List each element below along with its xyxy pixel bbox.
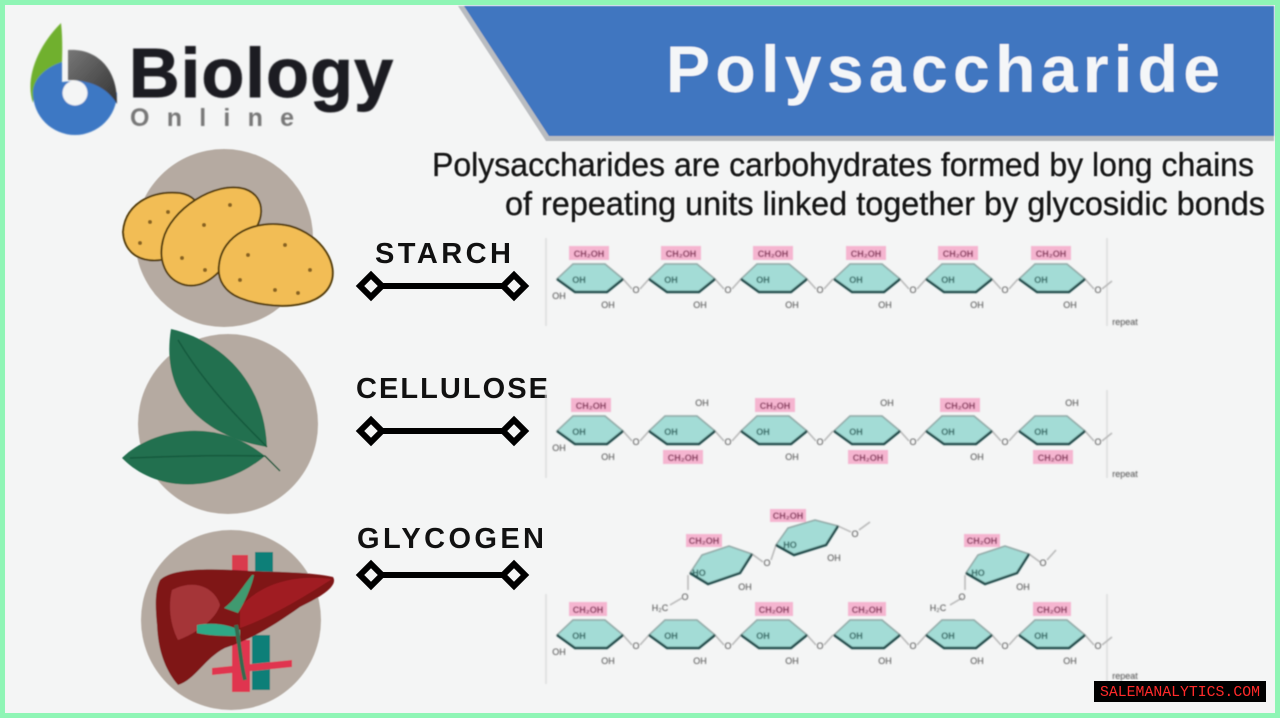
starch chain: OH — [878, 300, 892, 310]
icon: logo grey arc — [68, 50, 117, 104]
cellulose chain: OH — [849, 427, 863, 437]
title banner — [458, 6, 1274, 141]
starch chain: OH — [664, 275, 678, 285]
icon: liver — [141, 530, 334, 710]
branch ring 2 — [770, 509, 841, 563]
watermark: SALEMANALYTICS.COM — [1100, 685, 1260, 701]
glycogen chain: OH — [664, 631, 678, 641]
cellulose chain — [546, 390, 1138, 479]
glycogen chain: O — [816, 641, 824, 651]
glycogen chain: repeat — [1112, 671, 1138, 681]
glycogen chain: CH₂OH — [1037, 605, 1067, 615]
starch chain: O — [1094, 285, 1102, 295]
cellulose chain: OH — [1065, 398, 1079, 408]
glycogen chain: OH — [601, 656, 615, 666]
cellulose chain: OH — [970, 452, 984, 462]
description text: Polysaccharides are carbohydrates formed by long chains — [432, 146, 1254, 183]
glycogen chain: H₂C — [652, 603, 669, 613]
icon: potatoes — [123, 149, 333, 327]
cellulose chain: CH₂OH — [576, 401, 606, 411]
glycogen chain: O — [763, 558, 771, 568]
cellulose chain: O — [1094, 437, 1102, 447]
cellulose chain: O — [909, 437, 917, 447]
cellulose chain: O — [632, 437, 640, 447]
glycogen chain: OH — [1063, 656, 1077, 666]
branch ring 1: HO — [692, 568, 706, 578]
starch chain: OH — [1034, 275, 1048, 285]
starch chain: CH₂OH — [758, 249, 788, 259]
starch chain: repeat — [1112, 317, 1138, 327]
glycogen chain — [546, 509, 1138, 684]
starch label — [360, 238, 525, 297]
starch chain: OH — [601, 300, 615, 310]
cellulose chain: O — [816, 437, 824, 447]
starch chain: O — [1001, 285, 1009, 295]
starch chain: CH₂OH — [1036, 249, 1066, 259]
starch chain: CH₂OH — [666, 249, 696, 259]
logo wordmark: Biology — [129, 34, 393, 112]
watermark — [1094, 681, 1266, 702]
starch chain: OH — [572, 275, 586, 285]
starch chain: OH — [941, 275, 955, 285]
description text — [432, 146, 1265, 222]
glycogen chain: CH₂OH — [573, 605, 603, 615]
starch label: STARCH — [375, 238, 511, 270]
glycogen chain: OH — [756, 631, 770, 641]
logo — [30, 23, 393, 135]
icon: cellulose connector — [360, 420, 525, 442]
glycogen chain: H₂C — [930, 603, 947, 613]
cellulose chain: OH — [664, 427, 678, 437]
starch chain: O — [816, 285, 824, 295]
starch chain — [546, 238, 1138, 327]
glycogen chain: O — [909, 641, 917, 651]
starch chain: OH — [849, 275, 863, 285]
glycogen chain: O — [1001, 641, 1009, 651]
cellulose chain: CH₂OH — [760, 401, 790, 411]
cellulose chain: OH — [695, 398, 709, 408]
icon: logo leaf — [30, 23, 62, 103]
icon: logo blue ring — [33, 62, 117, 135]
icon: glycogen connector — [360, 564, 525, 586]
starch chain: OH — [1063, 300, 1077, 310]
branch ring 2: HO — [783, 540, 797, 550]
branch ring 1: OH — [738, 582, 752, 592]
cellulose chain: repeat — [1112, 469, 1138, 479]
title: Polysaccharide — [666, 32, 1220, 106]
glycogen chain: OH — [785, 656, 799, 666]
branch ring 3: OH — [1016, 582, 1030, 592]
glycogen chain: O — [681, 592, 689, 602]
glycogen chain: CH₂OH — [852, 605, 882, 615]
starch chain: O — [909, 285, 917, 295]
glycogen chain: O — [1039, 558, 1047, 568]
glycogen chain: OH — [693, 656, 707, 666]
icon: logo ring hole — [62, 80, 88, 106]
glycogen chain: CH₂OH — [759, 605, 789, 615]
cellulose chain: CH₂OH — [853, 453, 883, 463]
glycogen chain: O — [851, 529, 859, 539]
branch ring 1: CH₂OH — [689, 536, 719, 546]
cellulose chain: OH — [572, 427, 586, 437]
cellulose chain: OH — [552, 443, 566, 453]
branch ring 1 — [686, 534, 752, 592]
glycogen chain: O — [724, 641, 732, 651]
glycogen chain: OH — [878, 656, 892, 666]
starch chain: CH₂OH — [574, 249, 604, 259]
starch chain: CH₂OH — [943, 249, 973, 259]
glycogen label — [357, 523, 544, 586]
branch ring 3: CH₂OH — [967, 536, 997, 546]
glycogen chain: OH — [552, 647, 566, 657]
cellulose chain: OH — [785, 452, 799, 462]
cellulose label — [356, 373, 548, 442]
glycogen chain: OH — [572, 631, 586, 641]
cellulose chain: OH — [756, 427, 770, 437]
glycogen chain: O — [958, 592, 966, 602]
starch chain: CH₂OH — [851, 249, 881, 259]
starch chain: OH — [970, 300, 984, 310]
starch chain: OH — [756, 275, 770, 285]
icon: leaves — [122, 329, 318, 514]
cellulose chain: O — [724, 437, 732, 447]
branch ring 2: OH — [827, 553, 841, 563]
starch chain: OH — [552, 291, 566, 301]
logo subtitle: Online — [130, 104, 294, 132]
cellulose chain: OH — [880, 398, 894, 408]
glycogen chain: OH — [1034, 631, 1048, 641]
glycogen label: GLYCOGEN — [357, 523, 544, 555]
cellulose chain: CH₂OH — [1038, 453, 1068, 463]
glycogen chain: O — [1094, 641, 1102, 651]
cellulose chain: OH — [601, 452, 615, 462]
starch chain: OH — [785, 300, 799, 310]
glycogen chain: OH — [849, 631, 863, 641]
description text: of repeating units linked together by glycosidic bonds — [505, 185, 1265, 222]
cellulose chain: CH₂OH — [945, 401, 975, 411]
starch chain: OH — [693, 300, 707, 310]
starch chain: O — [632, 285, 640, 295]
glycogen chain: OH — [941, 631, 955, 641]
cellulose label: CELLULOSE — [356, 373, 548, 405]
glycogen chain: O — [632, 641, 640, 651]
branch ring 3: HO — [971, 568, 985, 578]
cellulose chain: O — [1001, 437, 1009, 447]
branch ring 2: CH₂OH — [773, 511, 803, 521]
starch chain: O — [724, 285, 732, 295]
cellulose chain: OH — [1034, 427, 1048, 437]
branch ring 3 — [964, 534, 1030, 592]
cellulose chain: CH₂OH — [668, 453, 698, 463]
glycogen chain: OH — [970, 656, 984, 666]
icon: starch connector — [360, 275, 525, 297]
cellulose chain: OH — [941, 427, 955, 437]
